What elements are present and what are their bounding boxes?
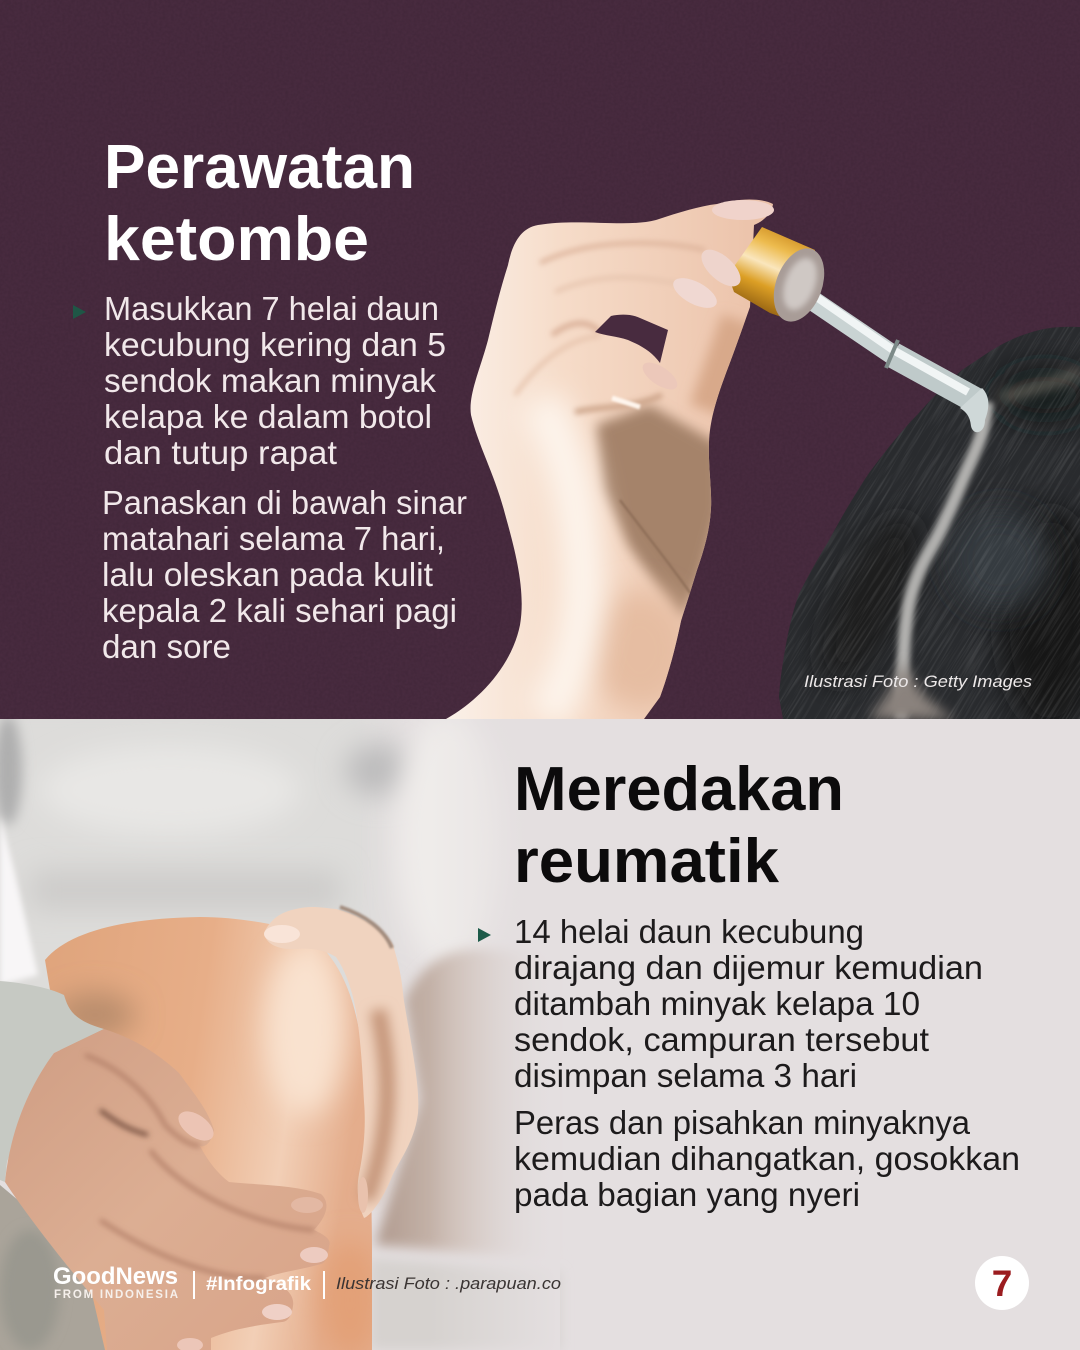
text block: step two: lalu oleskan pada kulit: [102, 556, 433, 593]
page number badge: [975, 1256, 1029, 1310]
knee: [45, 917, 372, 1350]
icon: bullet arrow: [73, 305, 86, 319]
text block: step two: [514, 1104, 1020, 1213]
text block: step two: pada bagian yang nyeri: [514, 1176, 860, 1213]
fade into background: [452, 952, 560, 1350]
photo credit: Ilustrasi Foto : .parapuan.co: [336, 1274, 561, 1293]
text block: step two: dan sore: [102, 628, 231, 665]
footer bar: [53, 1256, 1029, 1310]
text block: step one: 14 helai daun kecubung: [514, 913, 864, 950]
text block: step one: sendok, campuran tersebut: [514, 1021, 929, 1058]
text block: step two: [102, 484, 467, 665]
photo: head with parted dark hair: [779, 326, 1080, 719]
white sleeve and arm: [0, 815, 38, 985]
text block: step two: kepala 2 kali sehari pagi: [102, 592, 457, 629]
text block: step one: dan tutup rapat: [104, 434, 337, 471]
heading: Meredakan reumatik: [514, 755, 844, 896]
finger nails: [178, 1112, 214, 1140]
text block: step one: disimpan selama 3 hari: [514, 1057, 857, 1094]
icon: gold dropper cap: [732, 227, 824, 322]
text block: step one: dirajang dan dijemur kemudian: [514, 949, 983, 986]
knit sweater cuff: [0, 981, 104, 1182]
nails and finger tips: [638, 200, 774, 395]
panel: perawatan ketombe: [0, 0, 1080, 719]
logo: GoodNews from Indonesia: GoodNews: [53, 1263, 178, 1290]
icon: bullet arrow: [478, 928, 491, 942]
logo: GoodNews from Indonesia: FROM INDONESIA: [54, 1289, 178, 1301]
text block: step one: ditambah minyak kelapa 10: [514, 985, 920, 1022]
finger creases: [540, 243, 705, 263]
text block: step one: sendok makan minyak: [104, 362, 437, 399]
icon: glass dropper tube: [806, 294, 988, 432]
hand on the left of the knee: [5, 1029, 330, 1350]
hand on the right of the knee: [264, 907, 418, 1218]
panel background: [0, 719, 1080, 1350]
text block: step one: Masukkan 7 helai daun: [104, 290, 439, 327]
shirt: [0, 680, 380, 1010]
text block: step one: [514, 913, 983, 1094]
text block: step two: Peras dan pisahkan minyaknya: [514, 1104, 971, 1141]
text block: step two: matahari selama 7 hari,: [102, 520, 445, 557]
heading: Perawatan ketombe: [104, 133, 415, 274]
palm shading: [596, 405, 720, 620]
divider: [193, 1271, 195, 1299]
panel: meredakan reumatik: [0, 719, 1018, 1350]
text block: step one: kecubung kering dan 5: [104, 326, 446, 363]
divider: [323, 1271, 325, 1299]
decorative soft highlight below pinky: [612, 398, 640, 407]
rear thigh: [372, 946, 510, 1256]
panel background: [0, 0, 1080, 719]
heading: Meredakan reumatik: reumatik: [514, 827, 780, 896]
photo: hands holding knee: [0, 719, 510, 1350]
text block: step two: Panaskan di bawah sinar: [102, 484, 467, 521]
text block: step one: kelapa ke dalam botol: [104, 398, 432, 435]
hashtag: #Infografik: [206, 1274, 311, 1295]
heading: Perawatan ketombe: Perawatan: [104, 133, 415, 202]
heading: Perawatan ketombe: ketombe: [104, 205, 369, 274]
page number badge: 7: [992, 1263, 1012, 1304]
text block: step one: [104, 290, 446, 471]
heading: Meredakan reumatik: Meredakan: [514, 755, 844, 824]
photo: hand holding dropper: [446, 199, 988, 719]
text block: step two: kemudian dihangatkan, gosokkan: [514, 1140, 1020, 1177]
rug: [0, 1185, 105, 1350]
photo credit: Ilustrasi Foto : Getty Images: [804, 672, 1033, 691]
gap between fingers: [595, 315, 668, 363]
